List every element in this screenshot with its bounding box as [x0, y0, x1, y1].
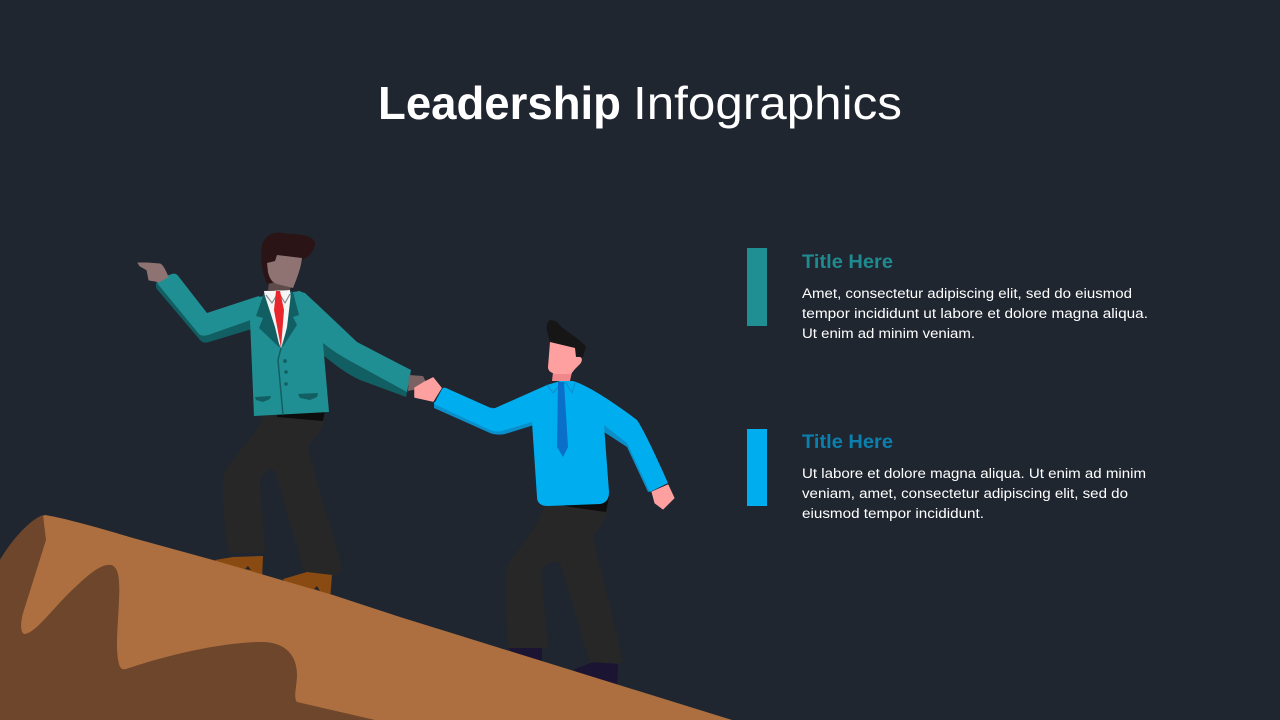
- point one text: tempor incididunt ut labore et dolore magna aliqua.: [802, 306, 1148, 321]
- teal man face: [267, 255, 302, 288]
- figure: leader in teal jacket: [138, 233, 427, 600]
- cliff: [0, 515, 732, 720]
- point one text: Amet, consectetur adipiscing elit, sed do eiusmod: [802, 286, 1132, 301]
- point one text: [802, 286, 1148, 341]
- teal man trousers: [223, 415, 342, 576]
- blue man face: [548, 342, 582, 374]
- teal man shirt: [264, 290, 292, 348]
- blue man shirt: [434, 381, 668, 506]
- teal man boots: [215, 556, 332, 600]
- cliff slope: [0, 515, 732, 720]
- teal man hand: [408, 375, 427, 391]
- teal man red tie: [274, 291, 284, 348]
- blue man shoes: [508, 648, 618, 690]
- point two text: veniam, amet, consectetur adipiscing elit, sed do: [802, 486, 1128, 501]
- blue man free hand: [652, 485, 674, 509]
- blue man belt: [553, 497, 609, 512]
- teal man pointing arm: [156, 282, 252, 343]
- teal man lapels: [256, 291, 299, 348]
- blue man collar: [547, 383, 575, 393]
- cliff shadow: [0, 515, 375, 720]
- point one: [747, 248, 1148, 341]
- boot notches: [245, 566, 320, 591]
- point two text: [802, 466, 1146, 521]
- blue man reaching hand: [415, 378, 441, 401]
- title: Leadership: [378, 77, 621, 129]
- blue man hair: [547, 320, 586, 357]
- point two text: Ut labore et dolore magna aliqua. Ut enim ad minim: [802, 466, 1146, 481]
- blue man trousers: [506, 505, 623, 663]
- teal man jacket: [250, 291, 329, 416]
- blue marker bar: [747, 429, 767, 506]
- teal man hair: [261, 233, 315, 284]
- teal man belt: [277, 410, 325, 421]
- blue man arm shadows: [434, 402, 653, 492]
- teal man neck: [268, 282, 291, 291]
- teal marker bar: [747, 248, 767, 326]
- teal man jacket seam and buttons: [255, 348, 318, 415]
- blue man neck: [552, 372, 572, 381]
- point two text: eiusmod tempor incididunt.: [802, 506, 984, 521]
- teal man collar: [266, 293, 290, 303]
- blue man tie: [557, 382, 568, 457]
- point one text: Ut enim ad minim veniam.: [802, 326, 975, 341]
- teal man pointing hand: [138, 263, 168, 282]
- point two: [747, 429, 1146, 521]
- point one heading: Title Here: [802, 252, 893, 273]
- title: Infographics: [633, 77, 902, 129]
- figure: follower in blue shirt: [415, 320, 674, 690]
- teal man reaching arm: [323, 340, 408, 397]
- point two heading: Title Here: [802, 432, 893, 453]
